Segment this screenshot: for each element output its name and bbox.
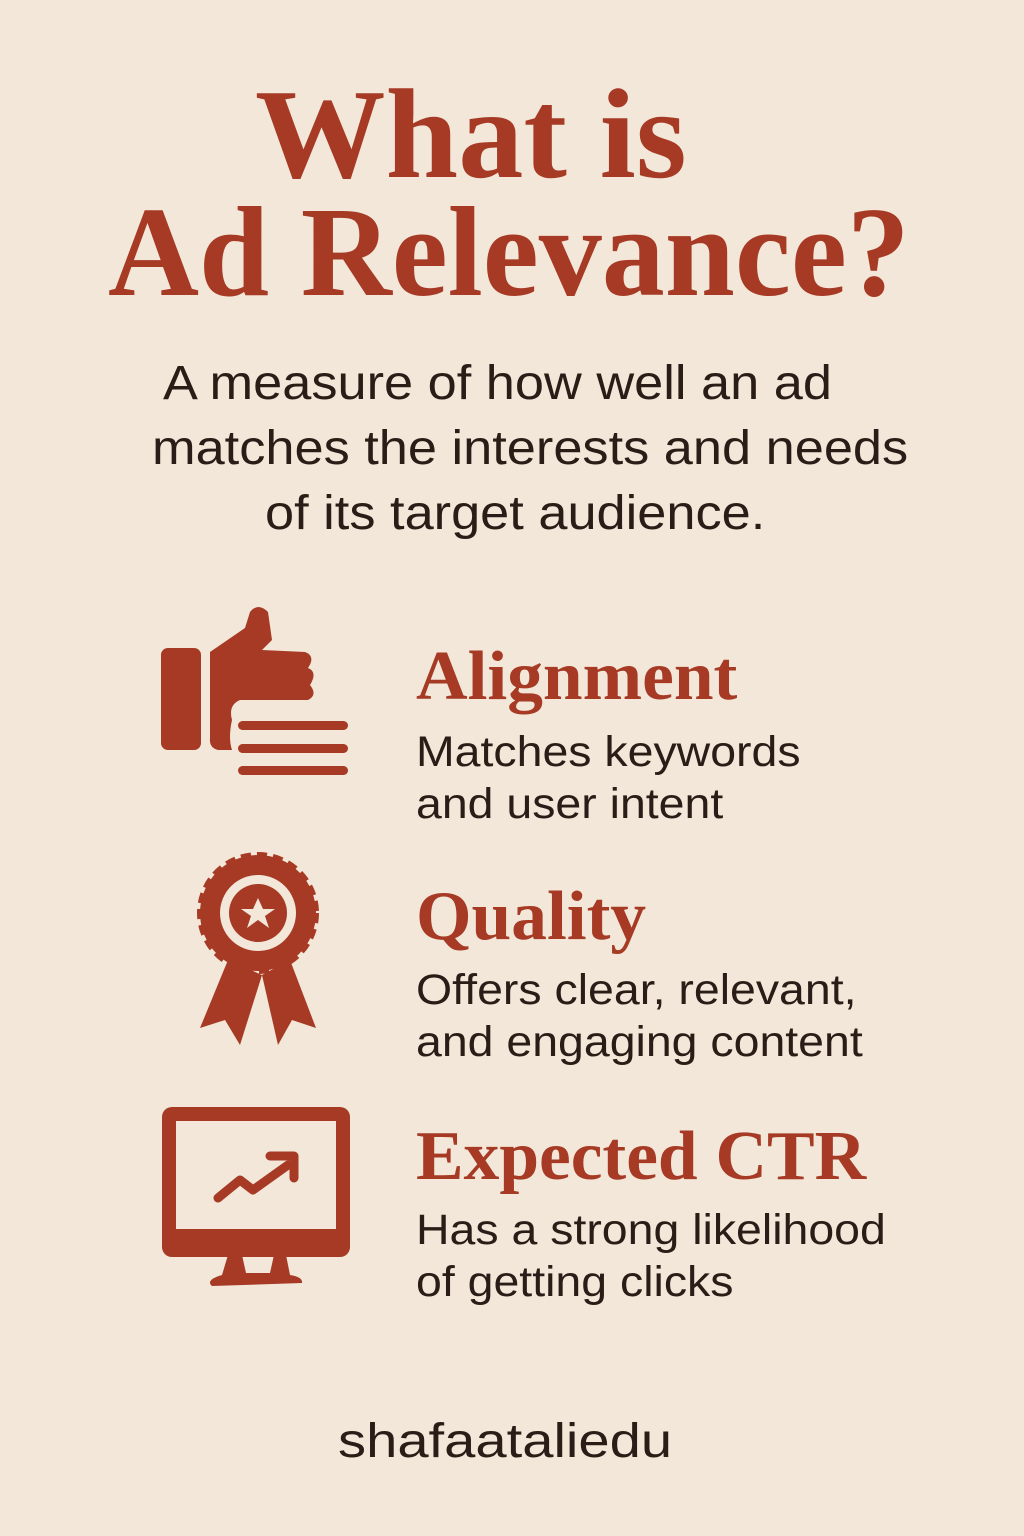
title	[108, 63, 910, 323]
icon: thumbs up	[161, 607, 348, 775]
text: quality desc: and engaging content	[416, 1018, 863, 1066]
text: alignment desc	[416, 728, 801, 828]
icon: monitor chart	[162, 1107, 350, 1286]
heading: Alignment: Alignment	[416, 638, 737, 715]
subtitle: of its target audience.	[265, 487, 765, 540]
text: alignment desc: and user intent	[416, 780, 723, 828]
text: alignment desc: Matches keywords	[416, 728, 801, 776]
text: quality desc: Offers clear, relevant,	[416, 966, 857, 1014]
text: ctr desc: Has a strong likelihood	[416, 1206, 886, 1254]
footer: shafaataliedu	[338, 1415, 672, 1468]
text: quality desc	[416, 966, 863, 1066]
title: Ad Relevance?	[108, 181, 910, 323]
subtitle: matches the interests and needs	[152, 422, 908, 475]
subtitle: A measure of how well an ad	[163, 357, 832, 410]
icon: award ribbon	[197, 852, 319, 1045]
text: ctr desc	[416, 1206, 886, 1306]
heading: Quality: Quality	[416, 878, 646, 955]
text: ctr desc: of getting clicks	[416, 1258, 733, 1306]
heading: Expected CTR: Expected CTR	[416, 1118, 866, 1195]
title: What is	[255, 63, 687, 205]
subtitle	[152, 357, 908, 540]
